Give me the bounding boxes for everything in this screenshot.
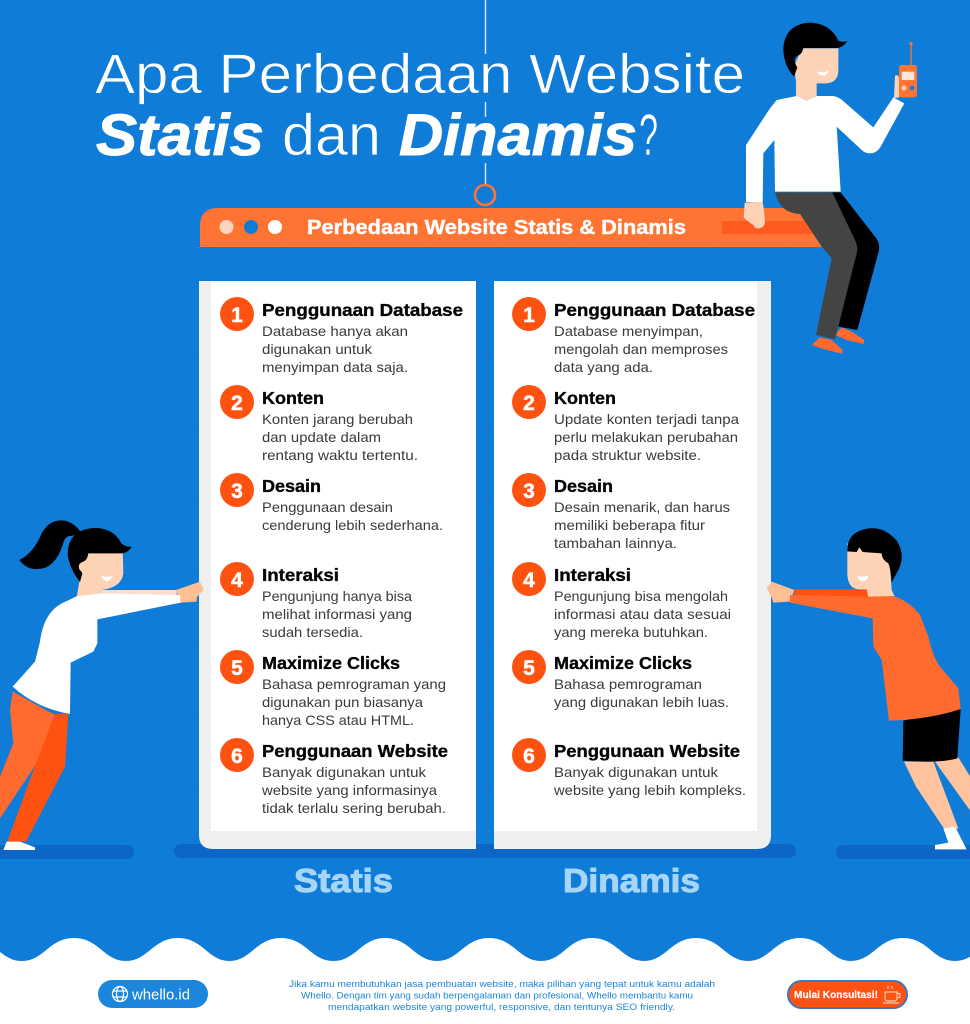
item 3: desain: Desain menarik, dan harus [554, 499, 730, 515]
item 5: maximize clicks: yang digunakan lebih luas. [554, 694, 729, 710]
item 4: interaksi [512, 562, 731, 640]
item 5: maximize clicks: digunakan pun biasanya [262, 694, 423, 710]
item 6: penggunaan website: Banyak digunakan untuk [554, 764, 719, 780]
item 2: konten: Konten [554, 388, 616, 408]
item 5: maximize clicks [512, 650, 729, 710]
ground shadows [0, 844, 970, 859]
item 4: interaksi: 4 [523, 569, 535, 592]
item 5: maximize clicks: Maximize Clicks [262, 653, 400, 673]
item 2: konten: pada struktur website. [554, 447, 701, 463]
item 4: interaksi: Pengunjung bisa mengolah [554, 588, 728, 604]
item 4: interaksi: Interaksi [262, 565, 339, 585]
item 1: penggunaan database: Penggunaan Database [262, 300, 463, 320]
item 2: konten: dan update dalam [262, 429, 381, 445]
item 4: interaksi: 4 [231, 569, 243, 592]
title [95, 42, 745, 168]
item 2: konten: perlu melakukan perubahan [554, 429, 738, 445]
title: Apa Perbedaan Website [95, 42, 745, 105]
figure: sitting man with radio [744, 23, 917, 354]
item 1: penggunaan database: Database hanya akan [262, 323, 408, 339]
item 1: penggunaan database: 1 [231, 304, 243, 327]
figure: pushing boy [767, 528, 970, 849]
item 4: interaksi: Pengunjung hanya bisa [262, 588, 412, 604]
item 4: interaksi: yang mereka butuhkan. [554, 624, 708, 640]
footer text: Whello. Dengan tim yang sudah berpengalaman dan profesional, Whello membantu kamu [301, 990, 693, 1002]
item 1: penggunaan database: digunakan untuk [262, 341, 373, 357]
footer text [289, 979, 715, 1013]
title: dan [282, 103, 381, 168]
item 6: penggunaan website: website yang lebih kompleks. [553, 782, 746, 798]
label: dinamis: Dinamis [563, 862, 700, 899]
item 5: maximize clicks: Bahasa pemrograman yang [262, 676, 446, 692]
item 1: penggunaan database: menyimpan data saja. [262, 359, 408, 375]
item 2: konten: Konten jarang berubah [262, 411, 413, 427]
title: ? [639, 103, 658, 168]
radio [899, 42, 917, 97]
item 6: penggunaan website: Banyak digunakan untuk [262, 764, 427, 780]
footer text: Jika kamu membutuhkan jasa pembuatan website, maka pilihan yang tepat untuk kamu adalah [289, 979, 715, 990]
item 5: maximize clicks: 5 [523, 657, 535, 680]
whello.id pill [98, 980, 208, 1008]
title: Statis [96, 103, 264, 168]
label: statis: Statis [294, 862, 393, 899]
footer text: mendapatkan website yang powerful, responsive, dan tentunya SEO friendly. [328, 1002, 675, 1013]
item 1: penggunaan database: mengolah dan memproses [554, 341, 728, 357]
item 2: konten: 2 [231, 392, 243, 415]
item 1: penggunaan database [512, 297, 755, 375]
item 3: desain [512, 473, 730, 551]
item 2: konten: rentang waktu tertentu. [262, 447, 418, 463]
icon: globe [112, 986, 128, 1002]
item 1: penggunaan database: 1 [523, 304, 535, 327]
item 3: desain: memiliki beberapa fitur [554, 517, 705, 533]
consultation button: Mulai Konsultasi! [794, 989, 878, 1001]
item 1: penggunaan database: Database menyimpan, [554, 323, 703, 339]
item 6: penggunaan website: 6 [231, 745, 243, 768]
hanging line and ring [475, 0, 495, 205]
whello.id pill: whello.id [131, 986, 190, 1004]
item 1: penggunaan database: data yang ada. [554, 359, 653, 375]
item 5: maximize clicks: hanya CSS atau HTML. [262, 712, 414, 728]
item 3: desain: Desain [554, 476, 613, 496]
item 1: penggunaan database [220, 297, 463, 375]
icon: coffee cup [883, 986, 900, 1003]
item 3: desain: 3 [523, 480, 535, 503]
item 6: penggunaan website [220, 738, 448, 816]
figure: pushing woman [0, 520, 204, 850]
item 6: penggunaan website: 6 [523, 745, 535, 768]
item 4: interaksi: informasi atau data sesuai [554, 606, 731, 622]
header bar [200, 208, 835, 247]
item 4: interaksi [220, 562, 412, 640]
header bar title: Perbedaan Website Statis & Dinamis [307, 217, 686, 239]
item 3: desain: 3 [231, 480, 243, 503]
item 2: konten: 2 [523, 392, 535, 415]
consultation button [788, 981, 907, 1008]
item 6: penggunaan website: Penggunaan Website [262, 741, 448, 761]
item 3: desain: Penggunaan desain [262, 499, 393, 515]
item 6: penggunaan website: website yang informasinya [261, 782, 437, 798]
item 4: interaksi: Interaksi [554, 565, 631, 585]
item 1: penggunaan database: Penggunaan Database [554, 300, 755, 320]
footer white wave [0, 938, 970, 1024]
item 2: konten: Update konten terjadi tanpa [554, 411, 739, 427]
item 5: maximize clicks: Maximize Clicks [554, 653, 692, 673]
item 2: konten: Konten [262, 388, 324, 408]
item 6: penggunaan website [512, 738, 746, 798]
item 3: desain: cenderung lebih sederhana. [262, 517, 443, 533]
item 6: penggunaan website: tidak terlalu sering berubah. [262, 800, 446, 816]
item 5: maximize clicks: 5 [231, 657, 243, 680]
item 3: desain [220, 473, 443, 533]
item 5: maximize clicks: Bahasa pemrograman [554, 676, 702, 692]
item 5: maximize clicks [220, 650, 446, 728]
item 6: penggunaan website: Penggunaan Website [554, 741, 740, 761]
item 2: konten [512, 385, 739, 463]
panel: statis [199, 281, 476, 849]
title: Dinamis [399, 103, 637, 168]
item 2: konten [220, 385, 418, 463]
item 4: interaksi: sudah tersedia. [262, 624, 363, 640]
item 3: desain: Desain [262, 476, 321, 496]
item 3: desain: tambahan lainnya. [554, 535, 677, 551]
panel: dinamis [494, 281, 771, 849]
item 4: interaksi: melihat informasi yang [262, 606, 412, 622]
